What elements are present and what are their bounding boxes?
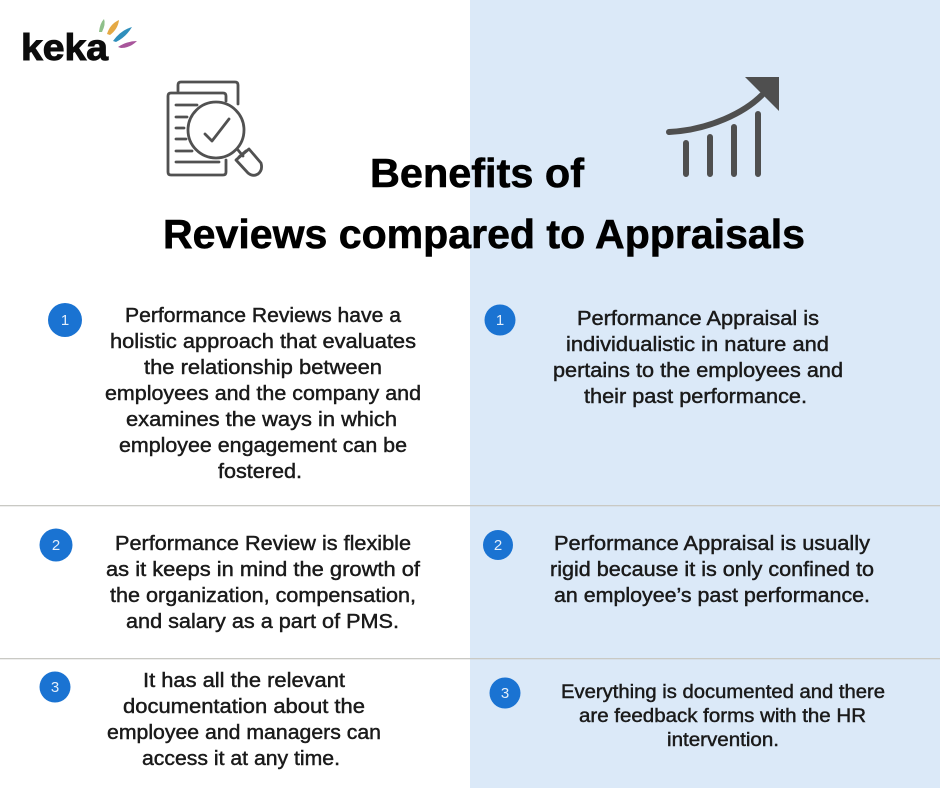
text: left point 1: fostered. [218,461,302,483]
icon: rising bar chart with arrow [669,77,779,174]
badge: right 3 [490,678,520,708]
badge: left 3 [40,672,70,702]
text: left point 1: Performance Reviews have a [125,305,402,327]
text: right point 1: their past performance. [584,386,807,408]
text: left point 3: employee and managers can [107,722,381,744]
text: left point 3: documentation about the [123,696,365,718]
text: left point 2 [106,533,420,633]
text: right point 3: Everything is documented and there [561,682,885,703]
icon: document with magnifying glass [168,82,262,175]
text: right point 3 [561,682,885,751]
text: left point 2: Performance Review is flexible [115,533,411,555]
text: right point 1: individualistic in nature and [566,334,829,356]
title: Benefits of [370,150,584,196]
badge: left 3: 3 [51,679,59,696]
badge: left 2: 2 [52,537,60,554]
text: left point 1: examines the ways in which [126,409,397,431]
badge: right 1: 1 [496,312,504,329]
badge: left 1: 1 [61,312,69,329]
text: right point 1: Performance Appraisal is [577,308,819,330]
badge: right 1 [484,304,516,336]
text: right point 2: rigid because it is only confined to [550,559,874,581]
logo: keka: keka [21,27,108,68]
badge: right 2: 2 [494,537,502,554]
text: right point 2: an employee’s past performance. [554,585,870,607]
text: right point 3: intervention. [667,730,779,751]
panel: appraisals background [470,0,940,788]
badge: right 2 [483,530,513,560]
text: right point 1 [553,308,843,408]
badge: left 2 [40,528,72,562]
text: left point 1: employees and the company and [105,383,421,405]
text: left point 3 [107,670,381,770]
title: Reviews compared to Appraisals [163,211,805,257]
text: left point 2: the organization, compensation, [110,585,416,607]
text: left point 2: as it keeps in mind the growth of [106,559,420,581]
badge: right 3: 3 [501,685,509,702]
text: left point 3: It has all the relevant [143,670,345,692]
text: left point 1: holistic approach that evaluates [110,331,416,353]
text: left point 1: employee engagement can be [119,435,407,457]
title [163,150,805,257]
text: left point 1 [105,305,421,483]
text: left point 1: the relationship between [144,357,382,379]
text: right point 3: are feedback forms with the HR [579,706,866,727]
text: right point 1: pertains to the employees and [553,360,843,382]
text: right point 2 [550,533,874,607]
logo: keka [21,19,137,68]
text: left point 3: access it at any time. [142,748,340,770]
badge: left 1 [48,303,82,337]
text: left point 2: and salary as a part of PMS. [126,611,399,633]
text: right point 2: Performance Appraisal is usually [554,533,870,555]
